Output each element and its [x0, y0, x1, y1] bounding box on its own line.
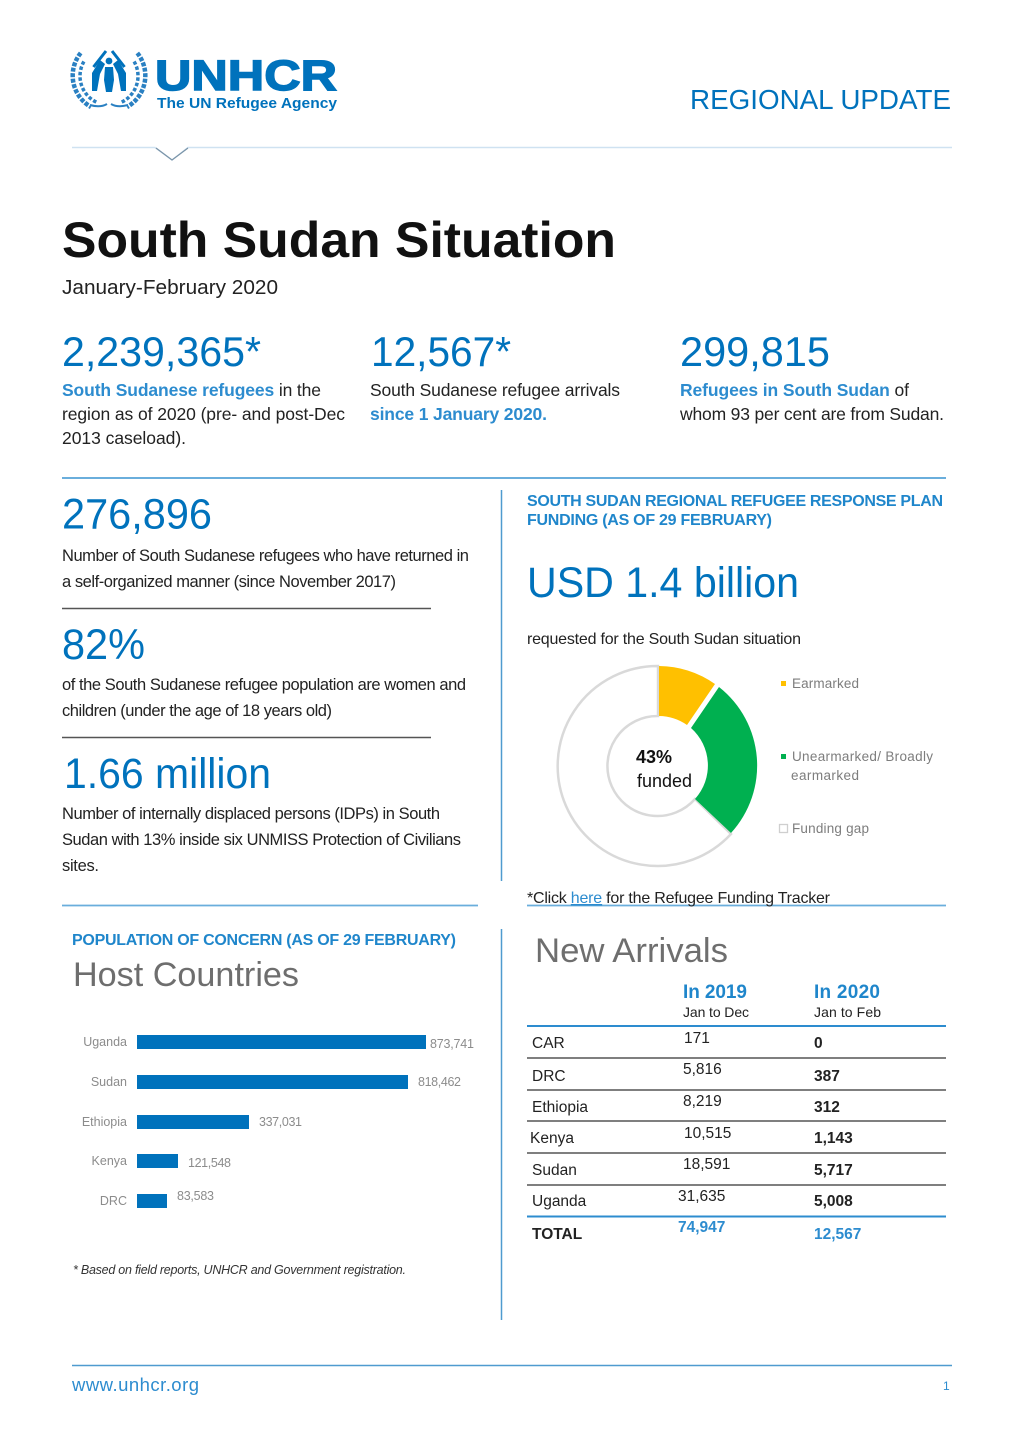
earmarked segment [659, 666, 715, 725]
header label: REGIONAL UPDATE [690, 84, 951, 115]
key figure: new arrivals: South Sudanese refugee arrivals [370, 380, 620, 400]
host countries heading: Host Countries [73, 956, 299, 994]
donut chart: funded [637, 771, 692, 791]
row: CAR: 171 [684, 1030, 710, 1047]
funding heading: FUNDING (AS OF 29 FEBRUARY) [527, 512, 772, 529]
bar: Uganda [83, 1035, 474, 1051]
bar: Ethiopia [82, 1115, 302, 1129]
bar: DRC: DRC [100, 1194, 127, 1208]
bar: Kenya: Kenya [92, 1154, 127, 1168]
footer rule [72, 1364, 952, 1366]
row: Kenya: 10,515 [684, 1125, 731, 1142]
bar: Kenya [92, 1154, 231, 1170]
row: DRC: 5,816 [683, 1061, 722, 1078]
stat: returnees: 276,896 [62, 490, 212, 538]
stat: IDPs: Number of internally displaced persons (IDPs) in South [62, 805, 440, 823]
stat: IDPs [62, 750, 461, 875]
row: Kenya: Kenya [530, 1130, 574, 1147]
row: total: 12,567 [814, 1226, 861, 1243]
row: DRC [532, 1061, 840, 1085]
row: Ethiopia: Ethiopia [532, 1099, 588, 1116]
row: DRC: 387 [814, 1068, 840, 1085]
bar: Uganda: 873,741 [430, 1037, 474, 1051]
donut legend: Earmarked [792, 676, 859, 691]
unearmarked segment [691, 687, 757, 833]
donut legend: earmarked [791, 768, 859, 783]
new arrivals heading: New Arrivals [535, 932, 728, 970]
bar: DRC: 83,583 [177, 1189, 214, 1203]
key figure: refugees in South Sudan: Refugees in South Sudan of [680, 380, 909, 400]
key figure: new arrivals [370, 328, 620, 424]
funding caption: requested for the South Sudan situation [527, 631, 801, 648]
new arrivals table [527, 982, 946, 1243]
row: Uganda [532, 1188, 853, 1210]
stat: women and children: of the South Sudanese refugee population are women and [62, 676, 466, 694]
stat: IDPs: 1.66 million [64, 750, 271, 798]
funding gap segment [558, 666, 731, 866]
donut chart [558, 666, 757, 866]
row: Uganda: 5,008 [814, 1193, 853, 1210]
bar: Uganda: Uganda [83, 1035, 127, 1049]
key figure: regional refugees: 2013 caseload). [62, 428, 186, 448]
funding heading: SOUTH SUDAN REGIONAL REFUGEE RESPONSE PLAN [527, 493, 943, 510]
donut legend [780, 676, 933, 836]
stat: women and children [62, 621, 466, 720]
row: Uganda: Uganda [532, 1193, 587, 1210]
row: Ethiopia: 312 [814, 1099, 840, 1116]
row: total [532, 1219, 861, 1243]
key figure: regional refugees: 2,239,365* [62, 328, 261, 375]
row: Kenya: 1,143 [814, 1130, 853, 1147]
logo: UNHCR [73, 51, 338, 112]
funding heading [527, 493, 943, 529]
title: South Sudan Situation [62, 212, 616, 268]
bar: Ethiopia: 337,031 [259, 1115, 302, 1129]
icon: UNHCR emblem [73, 51, 145, 107]
row: Sudan [532, 1156, 853, 1179]
donut centre label: 43% [636, 747, 672, 767]
row: Sudan: 18,591 [683, 1156, 730, 1173]
donut legend: Unearmarked/ Broadly [792, 749, 933, 764]
stat: IDPs: Sudan with 13% inside six UNMISS Protection of Civilians [62, 831, 461, 849]
header rule with notch [72, 148, 952, 160]
bar: Sudan [91, 1075, 461, 1089]
key figure: new arrivals: 12,567* [371, 328, 511, 375]
subtitle: January-February 2020 [62, 277, 278, 299]
row: Uganda: 31,635 [678, 1188, 725, 1205]
chart footnote: * Based on field reports, UNHCR and Government registration. [73, 1263, 406, 1277]
table header: Jan to Feb [814, 1004, 881, 1020]
key figure: regional refugees: region as of 2020 (pre- and post-Dec [62, 404, 345, 424]
stat: women and children: 82% [62, 621, 145, 669]
key figure: refugees in South Sudan: 299,815 [680, 328, 830, 375]
stat: IDPs: sites. [62, 857, 99, 875]
stat: returnees: a self-organized manner (since November 2017) [62, 573, 396, 591]
row: CAR [532, 1030, 823, 1052]
row: total: TOTAL [532, 1226, 582, 1243]
donut legend: Funding gap [792, 821, 869, 836]
funding amount: USD 1.4 billion [527, 559, 799, 607]
stat: returnees: Number of South Sudanese refugees who have returned in [62, 547, 469, 565]
table header: Jan to Dec [683, 1004, 749, 1020]
key figure: regional refugees: South Sudanese refugees in the [62, 380, 321, 400]
key figure: new arrivals: since 1 January 2020. [370, 404, 547, 424]
row: DRC: DRC [532, 1068, 566, 1085]
row: Ethiopia [532, 1093, 840, 1116]
bar: DRC [100, 1189, 214, 1208]
row: total: 74,947 [678, 1219, 725, 1236]
row: CAR: CAR [532, 1035, 565, 1052]
page number: 1 [943, 1379, 950, 1393]
wordmark: UNHCR [155, 52, 337, 100]
stat: returnees [62, 490, 469, 591]
bar: Ethiopia: Ethiopia [82, 1115, 127, 1129]
tagline: The UN Refugee Agency [157, 95, 338, 112]
bar: Sudan: Sudan [91, 1075, 127, 1089]
bar: Sudan: 818,462 [418, 1075, 461, 1089]
footer url: www.unhcr.org [71, 1374, 199, 1395]
table header: In 2019 [683, 982, 747, 1003]
key figure: regional refugees [62, 328, 345, 448]
key figure: refugees in South Sudan [679, 328, 944, 424]
dividers [62, 478, 946, 1320]
row: Ethiopia: 8,219 [683, 1093, 722, 1110]
row: Sudan: Sudan [532, 1162, 577, 1179]
row: Kenya [530, 1125, 853, 1147]
row: CAR: 0 [814, 1035, 823, 1052]
table header: In 2020 [814, 982, 880, 1003]
bar chart: host countries [82, 1035, 474, 1208]
funding tracker note: *Click here for the Refugee Funding Tracker [527, 890, 831, 907]
table header [683, 982, 881, 1020]
bar: Kenya: 121,548 [188, 1156, 231, 1170]
stat: women and children: children (under the age of 18 years old) [62, 702, 332, 720]
population heading: POPULATION OF CONCERN (AS OF 29 FEBRUARY) [72, 932, 456, 949]
row: Sudan: 5,717 [814, 1162, 853, 1179]
key figure: refugees in South Sudan: whom 93 per cent are from Sudan. [679, 404, 944, 424]
